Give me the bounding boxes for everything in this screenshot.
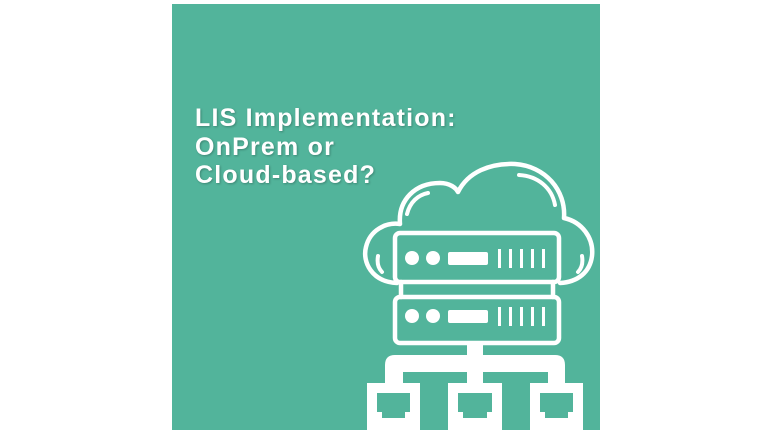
server 2 [395, 297, 559, 343]
ports [367, 383, 420, 430]
title: LIS Implementation: [195, 104, 457, 132]
network connector [385, 343, 565, 384]
cloud inner highlights [407, 193, 428, 214]
server 1 indicators [405, 251, 419, 265]
panel: green background [172, 4, 600, 430]
title: Cloud-based? [195, 161, 376, 189]
icon: cloud server network [365, 164, 592, 343]
server 1 [395, 233, 559, 282]
cloud outline [365, 164, 592, 283]
title: OnPrem or [195, 132, 335, 160]
title [195, 104, 457, 189]
server 2 indicators [405, 309, 419, 323]
